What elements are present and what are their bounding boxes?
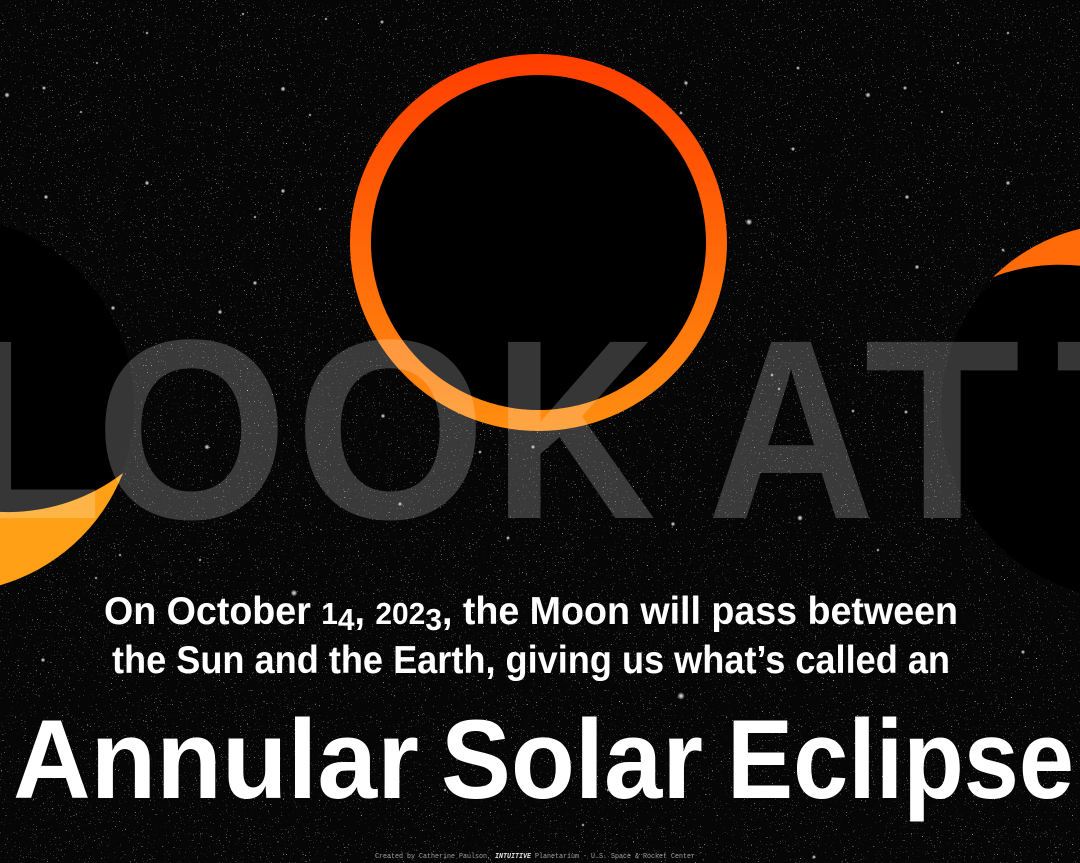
credit line: Created by Catherine Paulson, INTUITIVE Planetarium - U.S. Space & Rocket Center — [375, 853, 695, 861]
intro sentence — [104, 590, 958, 682]
translucent headline: LOOK AT T: A — [707, 286, 875, 572]
intro line 1: , — [355, 590, 375, 633]
intro line 2: the Sun and the Earth, giving us what’s called an — [112, 639, 950, 682]
translucent headline: LOOK AT T — [0, 286, 1080, 573]
translucent headline: LOOK AT T: T — [864, 287, 1020, 573]
right eclipse: dark moon disc — [941, 221, 1080, 599]
intro line 1: 202 — [375, 596, 425, 631]
left eclipse: amber crescent sun — [0, 254, 123, 593]
translucent headline: LOOK AT T: O — [295, 287, 486, 573]
right eclipse: orange crescent sun — [993, 223, 1080, 589]
intro line 1: 3 — [425, 602, 442, 637]
main title: Annular — [13, 697, 419, 822]
translucent headline: LOOK AT T: O — [95, 288, 288, 573]
intro line 1: On October 1 — [104, 590, 339, 633]
main title: Solar — [441, 697, 703, 822]
translucent headline: LOOK AT T: K — [493, 288, 656, 573]
intro line 1: 4 — [338, 602, 355, 637]
main title — [13, 697, 1074, 822]
annular eclipse ring — [350, 54, 727, 431]
left eclipse: dark moon disc — [0, 216, 134, 594]
intro line 1: , the Moon will pass between — [442, 590, 958, 633]
